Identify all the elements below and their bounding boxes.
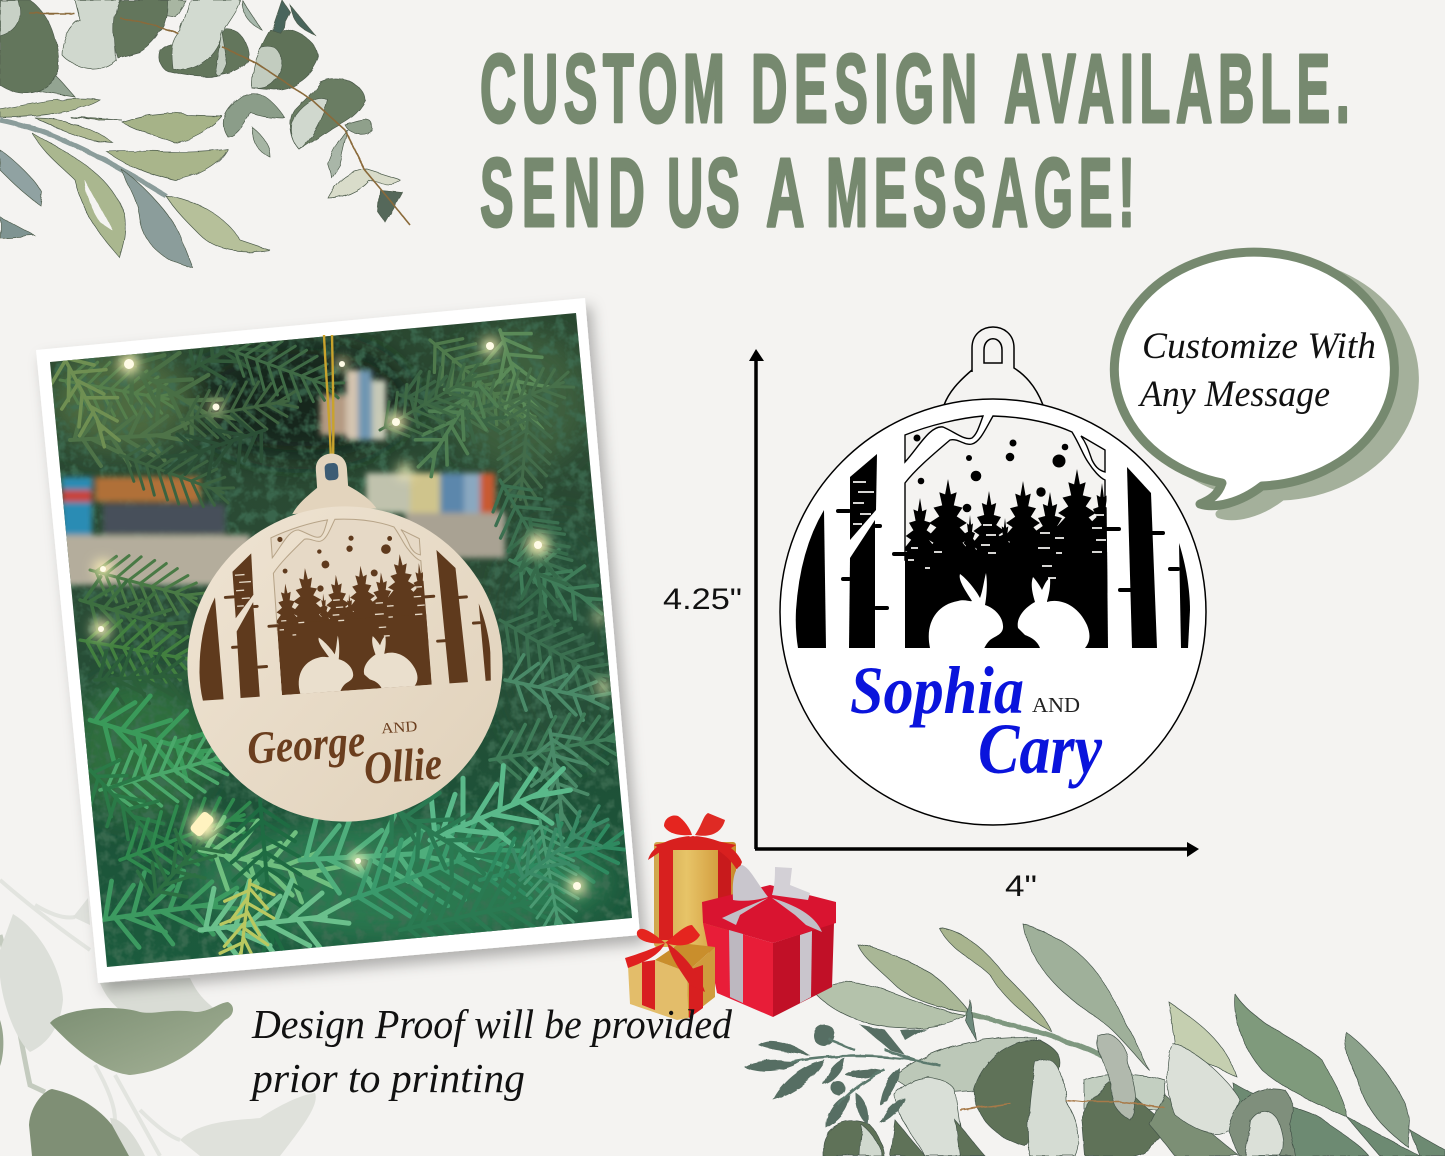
- gift: small gold box: [625, 925, 715, 1020]
- gift: large red box: [702, 865, 836, 1017]
- bubble text: [1137, 326, 1376, 415]
- title: MESSAGE!: [826, 139, 1135, 247]
- bubble text: Any Message: [1137, 374, 1330, 415]
- bubble text: Customize With: [1142, 326, 1376, 367]
- names on proof: [850, 652, 1103, 789]
- design proof note: Design Proof will be provided: [251, 1001, 732, 1047]
- foliage: bottom-left faded leaves: [0, 880, 316, 1156]
- gold string: [324, 335, 333, 462]
- engraved names: [246, 709, 444, 802]
- title: CUSTOM: [480, 35, 725, 143]
- dimension arrow: width: [755, 842, 1199, 857]
- names on proof: Cary: [978, 709, 1103, 789]
- names on proof: Sophia: [850, 652, 1024, 728]
- engraved names: AND: [381, 719, 418, 737]
- title: DESIGN: [751, 35, 977, 143]
- panel: framed photo of wooden ornament on tree: [36, 290, 640, 983]
- design proof note: [249, 1001, 732, 1101]
- title: SEND: [480, 139, 645, 247]
- title: A: [766, 138, 805, 247]
- title: [480, 35, 1350, 247]
- icon: gift boxes: [625, 813, 836, 1020]
- photo lights: [92, 338, 609, 895]
- title: US: [667, 139, 740, 247]
- gift: gold cylinder: [648, 813, 742, 947]
- engraved names: George: [246, 715, 367, 774]
- design proof note: prior to printing: [249, 1055, 525, 1101]
- ornament outline design proof: [780, 327, 1206, 825]
- label: height: 4.25": [663, 583, 742, 616]
- engraved names: Ollie: [362, 737, 444, 794]
- dimension arrow: height: [749, 349, 764, 849]
- wooden ornament: [173, 443, 513, 832]
- photo scene: blurred tree and shelves: [36, 290, 640, 980]
- foliage: top-left eucalyptus and olive leaves: [0, 0, 410, 268]
- foliage: bottom-right watercolor leaves: [744, 925, 1445, 1156]
- label: width: 4": [1005, 870, 1037, 903]
- title: AVAILABLE.: [1004, 35, 1350, 143]
- speech bubble callout: [1114, 252, 1414, 516]
- and label: AND: [1032, 693, 1080, 717]
